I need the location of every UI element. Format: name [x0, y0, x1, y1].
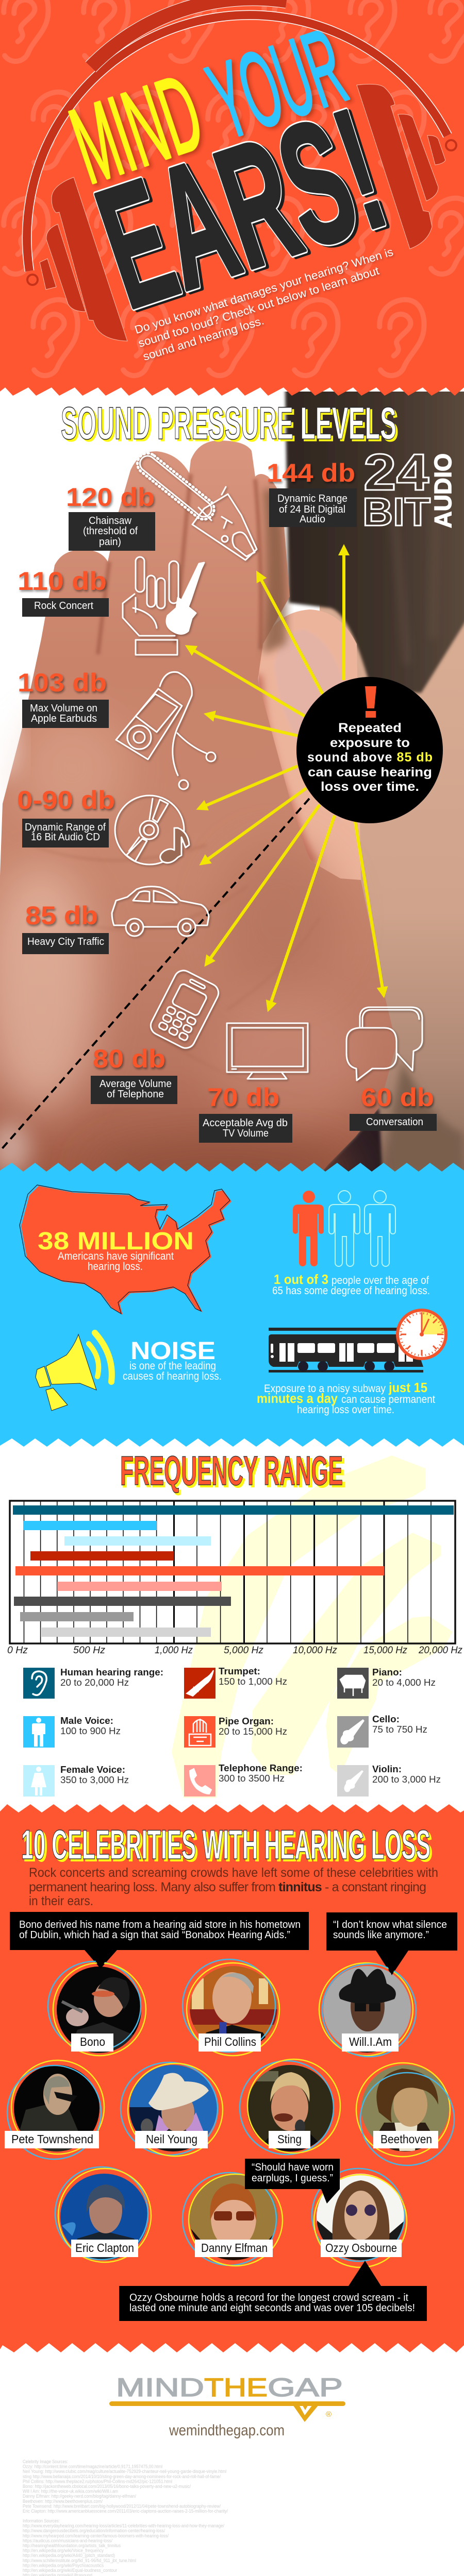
text: sources: Danny Elfman: http://geeky-nerd.com/blog/tag/danny-elfman/ — [23, 2494, 136, 2499]
item: 85 db — [22, 901, 109, 954]
callout: earplugs: earplugs, I guess.” — [252, 2173, 333, 2184]
callout: 85 db warning: can cause hearing — [308, 765, 432, 779]
title: EARS! — [78, 72, 408, 347]
item: 0-90 db — [17, 786, 115, 848]
text: sources: sting http://www.bellanaija.com/2014/10/10/sting-green-day-among-nominees-for-rock-and-roll-hall-of-fame/ — [23, 2474, 221, 2479]
text: subway exposure: just 15 — [388, 1380, 427, 1395]
item: 103 db — [18, 668, 109, 728]
legend: telephone: 300 to 3500 Hz — [219, 1773, 285, 1784]
portrait: Phil Collins — [183, 1959, 284, 2056]
text: sources: http://en.wikipedia.org/wiki/Psychoacoustics — [23, 2563, 104, 2568]
item: 120 db — [66, 483, 155, 551]
legend: violin: Violin: — [372, 1764, 402, 1774]
legend: pipe organ — [184, 1716, 287, 1748]
legend: violin — [337, 1764, 441, 1797]
item: 110 db — [18, 567, 109, 617]
portrait: Ozzy Osbourne — [312, 2168, 407, 2267]
chart: frequency ranges: 5,000 Hz — [224, 1645, 264, 1656]
intro paragraph: in their ears. — [29, 1894, 93, 1908]
text: 1 out of 3 — [272, 1272, 430, 1297]
icon: clock — [397, 1310, 446, 1359]
icon: rock hand with guitar — [123, 557, 204, 655]
portrait: Beethoven: Beethoven — [380, 2132, 432, 2146]
icon: megaphone — [36, 1333, 112, 1411]
portrait: Danny Elfman: Danny Elfman — [201, 2241, 268, 2255]
chart: frequency ranges: 10,000 Hz — [293, 1645, 337, 1656]
portrait: Phil Collins: Phil Collins — [204, 2035, 256, 2048]
item: 70 db: TV Volume — [223, 1128, 269, 1139]
chart: frequency ranges: 1,000 Hz — [155, 1645, 193, 1656]
portrait: Pete Townshend: Pete Townshend — [11, 2132, 93, 2146]
text: sources: http://www.myhearpod.com/learning-center/famous-boomers-with-hearing-loss/ — [23, 2533, 169, 2538]
item: 103 db: 103 db — [18, 668, 107, 697]
callout: Bono: of Dublin, which had a sign that said “Bonabox Hearing Aids.” — [19, 1929, 290, 1941]
text: sources: http://en.wikipedia.org/wiki/Equal-loudness_contour — [23, 2568, 117, 2573]
text: sources: Eric Clapton: http://www.americanbluesscene.com/2011/03/eric-claptons-auction-raises-2-15-million-for-charity/ — [23, 2509, 228, 2514]
heading: frequency range — [120, 1448, 345, 1496]
text: subway exposure: can cause permanent — [341, 1394, 435, 1405]
text: sources: Celebrity Image Sources: — [23, 2459, 68, 2464]
item: 85 db: Heavy City Traffic — [27, 936, 104, 947]
callout: 85 db warning: exposure to — [330, 736, 410, 750]
text: sources: Bono: http://jackontheweb.cbslocal.com/2013/05/16/bono-talks-poverty-and-new-u2-music/ — [23, 2484, 191, 2489]
icon: 24 bit audio — [362, 444, 456, 534]
logo: mind the gap: MIND — [116, 2373, 204, 2402]
text: 1 out of 3: people over the age of — [332, 1275, 429, 1286]
item: 0-90 db: 0-90 db — [17, 786, 115, 815]
text: sources: http://www.schillerinstitute.org/fid_91-96/fid_911_jbt_tune.html — [23, 2558, 136, 2563]
callout: Will.I.Am — [326, 1912, 457, 1975]
chart: frequency ranges — [7, 1500, 462, 1656]
icon: car — [112, 887, 209, 936]
chart: frequency ranges: 500 Hz — [73, 1645, 106, 1656]
title: MIND: MIND — [57, 51, 216, 207]
text: sources: Will I Am: http://the-voice-uk.wikia.com/wiki/Will.i.am — [23, 2489, 118, 2494]
icon: television — [227, 1023, 308, 1079]
text: sources: http://en.wikipedia.org/wiki/A440_(pitch_standard) — [23, 2553, 115, 2558]
dashed divider — [0, 799, 309, 1151]
intro paragraph — [29, 1866, 438, 1908]
portrait: Sting: Sting — [277, 2132, 302, 2146]
item: 103 db: Apple Earbuds — [31, 713, 97, 724]
icon: 24 bit audio: BIT — [362, 490, 430, 534]
legend: piano — [337, 1667, 436, 1699]
legend: trumpet — [184, 1666, 287, 1699]
legend: trumpet: 150 to 1,000 Hz — [219, 1676, 287, 1687]
callout: Ozzy record — [119, 2261, 427, 2321]
panel: frequency range — [0, 1438, 464, 1814]
photo: hand cupped to ear — [0, 386, 464, 1200]
icon: speech bubbles — [346, 1007, 422, 1080]
callout: Bono — [10, 1912, 309, 1969]
callout: 85 db warning: sound above 85 db — [307, 750, 433, 765]
callout: earplugs — [245, 2159, 340, 2204]
background ear pattern — [4, 0, 464, 376]
text: sources: Ozzy: http://content.time.com/time/magazine/article/0,9171,1957475,00.html — [23, 2464, 162, 2469]
text: subway exposure — [257, 1380, 435, 1416]
callout: Will.I.Am: sounds like anymore.” — [333, 1929, 429, 1941]
map: 38 million: 38 MILLION — [38, 1228, 194, 1255]
intro text: Do you know what damages your hearing? When is — [133, 245, 395, 336]
map: 38 million: hearing loss. — [88, 1261, 143, 1273]
legend: pipe organ: 20 to 15,000 Hz — [219, 1726, 287, 1737]
legend: cello: 75 to 750 Hz — [372, 1724, 427, 1735]
text: sources: https://audicus.com/musicians-and-hearing-loss/ — [23, 2538, 112, 2543]
intro paragraph: permanent hearing loss. Many also suffer from tinnitus - a constant ringing — [29, 1880, 426, 1894]
item: 144 db: of 24 Bit Digital — [279, 504, 345, 515]
item: 144 db: Dynamic Range — [277, 493, 347, 504]
text: subway exposure: hearing loss over time. — [297, 1404, 394, 1416]
icon: cd with music note — [115, 795, 189, 865]
legend: male voice: 100 to 900 Hz — [60, 1726, 121, 1736]
intro text: sound too loud? Check out below to learn about — [137, 264, 380, 350]
white zigzag and background — [0, 2343, 464, 2576]
legend: male voice — [23, 1716, 121, 1748]
item: 80 db: of Telephone — [107, 1089, 164, 1100]
item: 80 db: 80 db — [93, 1044, 165, 1073]
legend: female voice: 350 to 3,000 Hz — [60, 1775, 129, 1785]
chart: frequency ranges: 15,000 Hz — [363, 1645, 407, 1656]
portrait: Sting — [240, 2059, 340, 2155]
callout: earplugs: “Should have worn — [252, 2162, 334, 2173]
icon: headphones — [27, 0, 456, 341]
item: 70 db: Acceptable Avg db — [203, 1117, 288, 1129]
item: 60 db: Conversation — [366, 1116, 423, 1128]
item: 60 db — [350, 1083, 437, 1131]
legend: violin: 200 to 3,000 Hz — [372, 1774, 441, 1785]
item: 144 db: Audio — [300, 514, 325, 525]
text: sources: http://www.dangerousdecibels.org/education/information-center/hearing-loss/ — [23, 2528, 165, 2533]
portrait: Danny Elfman — [183, 2172, 284, 2266]
legend: trumpet: Trumpet: — [219, 1666, 260, 1676]
item: 110 db: Rock Concert — [34, 600, 93, 612]
portrait: Eric Clapton — [55, 2167, 152, 2264]
item: 144 db — [267, 459, 357, 527]
callout: 85 db warning — [296, 677, 443, 823]
panel: header — [0, 0, 464, 397]
text: sources: Beethoven: http://www.beethovenplus.com/ — [23, 2499, 103, 2504]
callout: Bono: Bono derived his name from a hearing aid store in his hometown — [19, 1919, 301, 1930]
text: sources: http://en.wikipedia.org/wiki/Voice_frequency — [23, 2548, 104, 2553]
icon: music player with earbuds — [116, 672, 216, 789]
zigzag top edge — [0, 385, 464, 396]
legend: human hearing: 20 to 20,000 Hz — [60, 1677, 129, 1688]
portrait: Bono — [48, 1950, 146, 2056]
portrait: Beethoven — [356, 2061, 454, 2165]
legend: pipe organ: Pipe Organ: — [219, 1716, 274, 1726]
intro text: sound and hearing loss. — [141, 314, 266, 363]
text: noise: NOISE — [130, 1337, 216, 1365]
icon: 24 bit audio: 24 — [363, 444, 429, 501]
item: 60 db: 60 db — [361, 1083, 434, 1112]
map: 38 million: Americans have significant — [58, 1250, 174, 1262]
map: 38 million — [20, 1185, 231, 1315]
background large ear — [172, 1455, 453, 1798]
text: noise — [123, 1337, 222, 1382]
item: 103 db: Max Volume on — [30, 703, 97, 714]
legend: cello — [337, 1714, 427, 1748]
legend: female voice: Female Voice: — [60, 1765, 125, 1775]
item: 144 db: 144 db — [267, 459, 355, 487]
text: sources: http://hearinghealthfoundation.org/artists_talk_tinnitus — [23, 2543, 121, 2548]
logo: mind the gap — [109, 2373, 345, 2422]
panel: footer — [0, 2343, 464, 2576]
legend: male voice: Male Voice: — [60, 1716, 113, 1726]
chart: frequency ranges: 20,000 Hz — [418, 1645, 462, 1656]
item: 70 db: 70 db — [207, 1083, 279, 1112]
portrait: Eric Clapton: Eric Clapton — [75, 2241, 134, 2255]
text: 1 out of 3: 1 out of 3 — [274, 1272, 328, 1287]
text: sources: Phil Collins: http://www.theplace2.ru/photos/Phil-Collins-md2642/pic-121051.html — [23, 2479, 172, 2484]
text: 1 out of 3: 65 has some degree of hearing loss. — [272, 1285, 430, 1297]
portrait: Pete Townshend — [5, 2060, 104, 2159]
item: 0-90 db: 16 Bit Audio CD — [31, 832, 100, 843]
white zigzag top and background — [0, 1438, 464, 1814]
legend: telephone: Telephone Range: — [219, 1763, 303, 1773]
icon: telephone — [147, 968, 222, 1051]
text: sources: http://www.everydayhearing.com/hearing-loss/articles/11-celebrities-with-hearing-loss-and-how-they-manage/ — [23, 2523, 224, 2529]
text: subway exposure: minutes a day — [257, 1391, 338, 1406]
item: 110 db: 110 db — [18, 567, 107, 596]
legend: female voice — [23, 1765, 129, 1797]
icon: one of three people — [293, 1191, 395, 1266]
icon: subway train — [269, 1328, 423, 1372]
callout: Ozzy record: Ozzy Osbourne holds a record for the longest crowd scream - it — [129, 2292, 408, 2303]
legend: piano: 20 to 4,000 Hz — [372, 1677, 436, 1688]
text: sources: Neil Young: http://www.clubic.com/mag/culture/actualite-752929-chanteur-neil-young-garde-disque-vinyle.html — [23, 2469, 226, 2474]
legend: cello: Cello: — [372, 1714, 400, 1724]
text: sources: Information Sources: — [23, 2518, 60, 2523]
legend: telephone — [184, 1763, 303, 1797]
text: sources — [23, 2459, 291, 2576]
legend: piano: Piano: — [372, 1667, 402, 1677]
logo: mind the gap: THE — [204, 2373, 268, 2402]
portrait: Neil Young — [121, 2061, 223, 2156]
text: sources: Pete Townsend: http://www.breitbart.com/big-hollywood/2012/11/04/pete-townshend-autobiography-review/ — [23, 2503, 221, 2509]
item: 120 db: 120 db — [66, 483, 155, 512]
text: noise: is one of the leading — [129, 1360, 216, 1372]
text: website: wemindthegap.com — [169, 2422, 285, 2439]
portrait: Will.I.Am — [319, 1962, 417, 2058]
legend: human hearing: Human hearing range: — [60, 1667, 163, 1677]
panel: sound pressure levels — [0, 385, 464, 1200]
icon: chainsaw — [133, 449, 257, 560]
arrows from callout — [182, 544, 390, 1014]
item: 0-90 db: Dynamic Range of — [25, 822, 106, 833]
blue zigzag top and background — [0, 1163, 464, 1448]
intro paragraph: Rock concerts and screaming crowds have left some of these celebrities with — [29, 1866, 438, 1880]
chart: frequency ranges: 0 Hz — [7, 1645, 28, 1656]
callout: 85 db warning: Repeated — [338, 721, 402, 735]
item: 85 db: 85 db — [25, 901, 98, 930]
callout: Ozzy record: lasted one minute and eight seconds and was over 105 decibels! — [129, 2302, 415, 2314]
orange zigzag top and background — [0, 1804, 464, 2353]
item: 120 db: Chainsaw — [89, 515, 132, 527]
item: 80 db: Average Volume — [100, 1078, 172, 1090]
item: 70 db — [199, 1083, 292, 1143]
callout: Will.I.Am: “I don’t know what silence — [333, 1919, 447, 1930]
text: noise: causes of hearing loss. — [123, 1370, 222, 1382]
panel: celebrities with hearing loss — [0, 1804, 464, 2353]
panel: statistics — [0, 1163, 464, 1448]
portrait: Ozzy Osbourne: Ozzy Osbourne — [325, 2241, 397, 2255]
item: 120 db: (threshold of — [83, 526, 138, 537]
legend: human hearing — [23, 1667, 163, 1699]
callout: 85 db warning: loss over time. — [321, 779, 419, 794]
icon: 24 bit audio: AUDIO — [429, 453, 456, 528]
text: subway exposure: Exposure to a noisy subway — [264, 1383, 386, 1395]
logo: mind the gap: GAP — [268, 2373, 343, 2402]
portrait: Will.I.Am: Will.I.Am — [349, 2035, 392, 2048]
item: 120 db: pain) — [99, 536, 121, 548]
portrait: Bono: Bono — [80, 2035, 105, 2048]
portrait: Neil Young: Neil Young — [146, 2132, 197, 2146]
logo: mind the gap: ® — [326, 2410, 332, 2419]
item: 80 db — [91, 1044, 177, 1104]
